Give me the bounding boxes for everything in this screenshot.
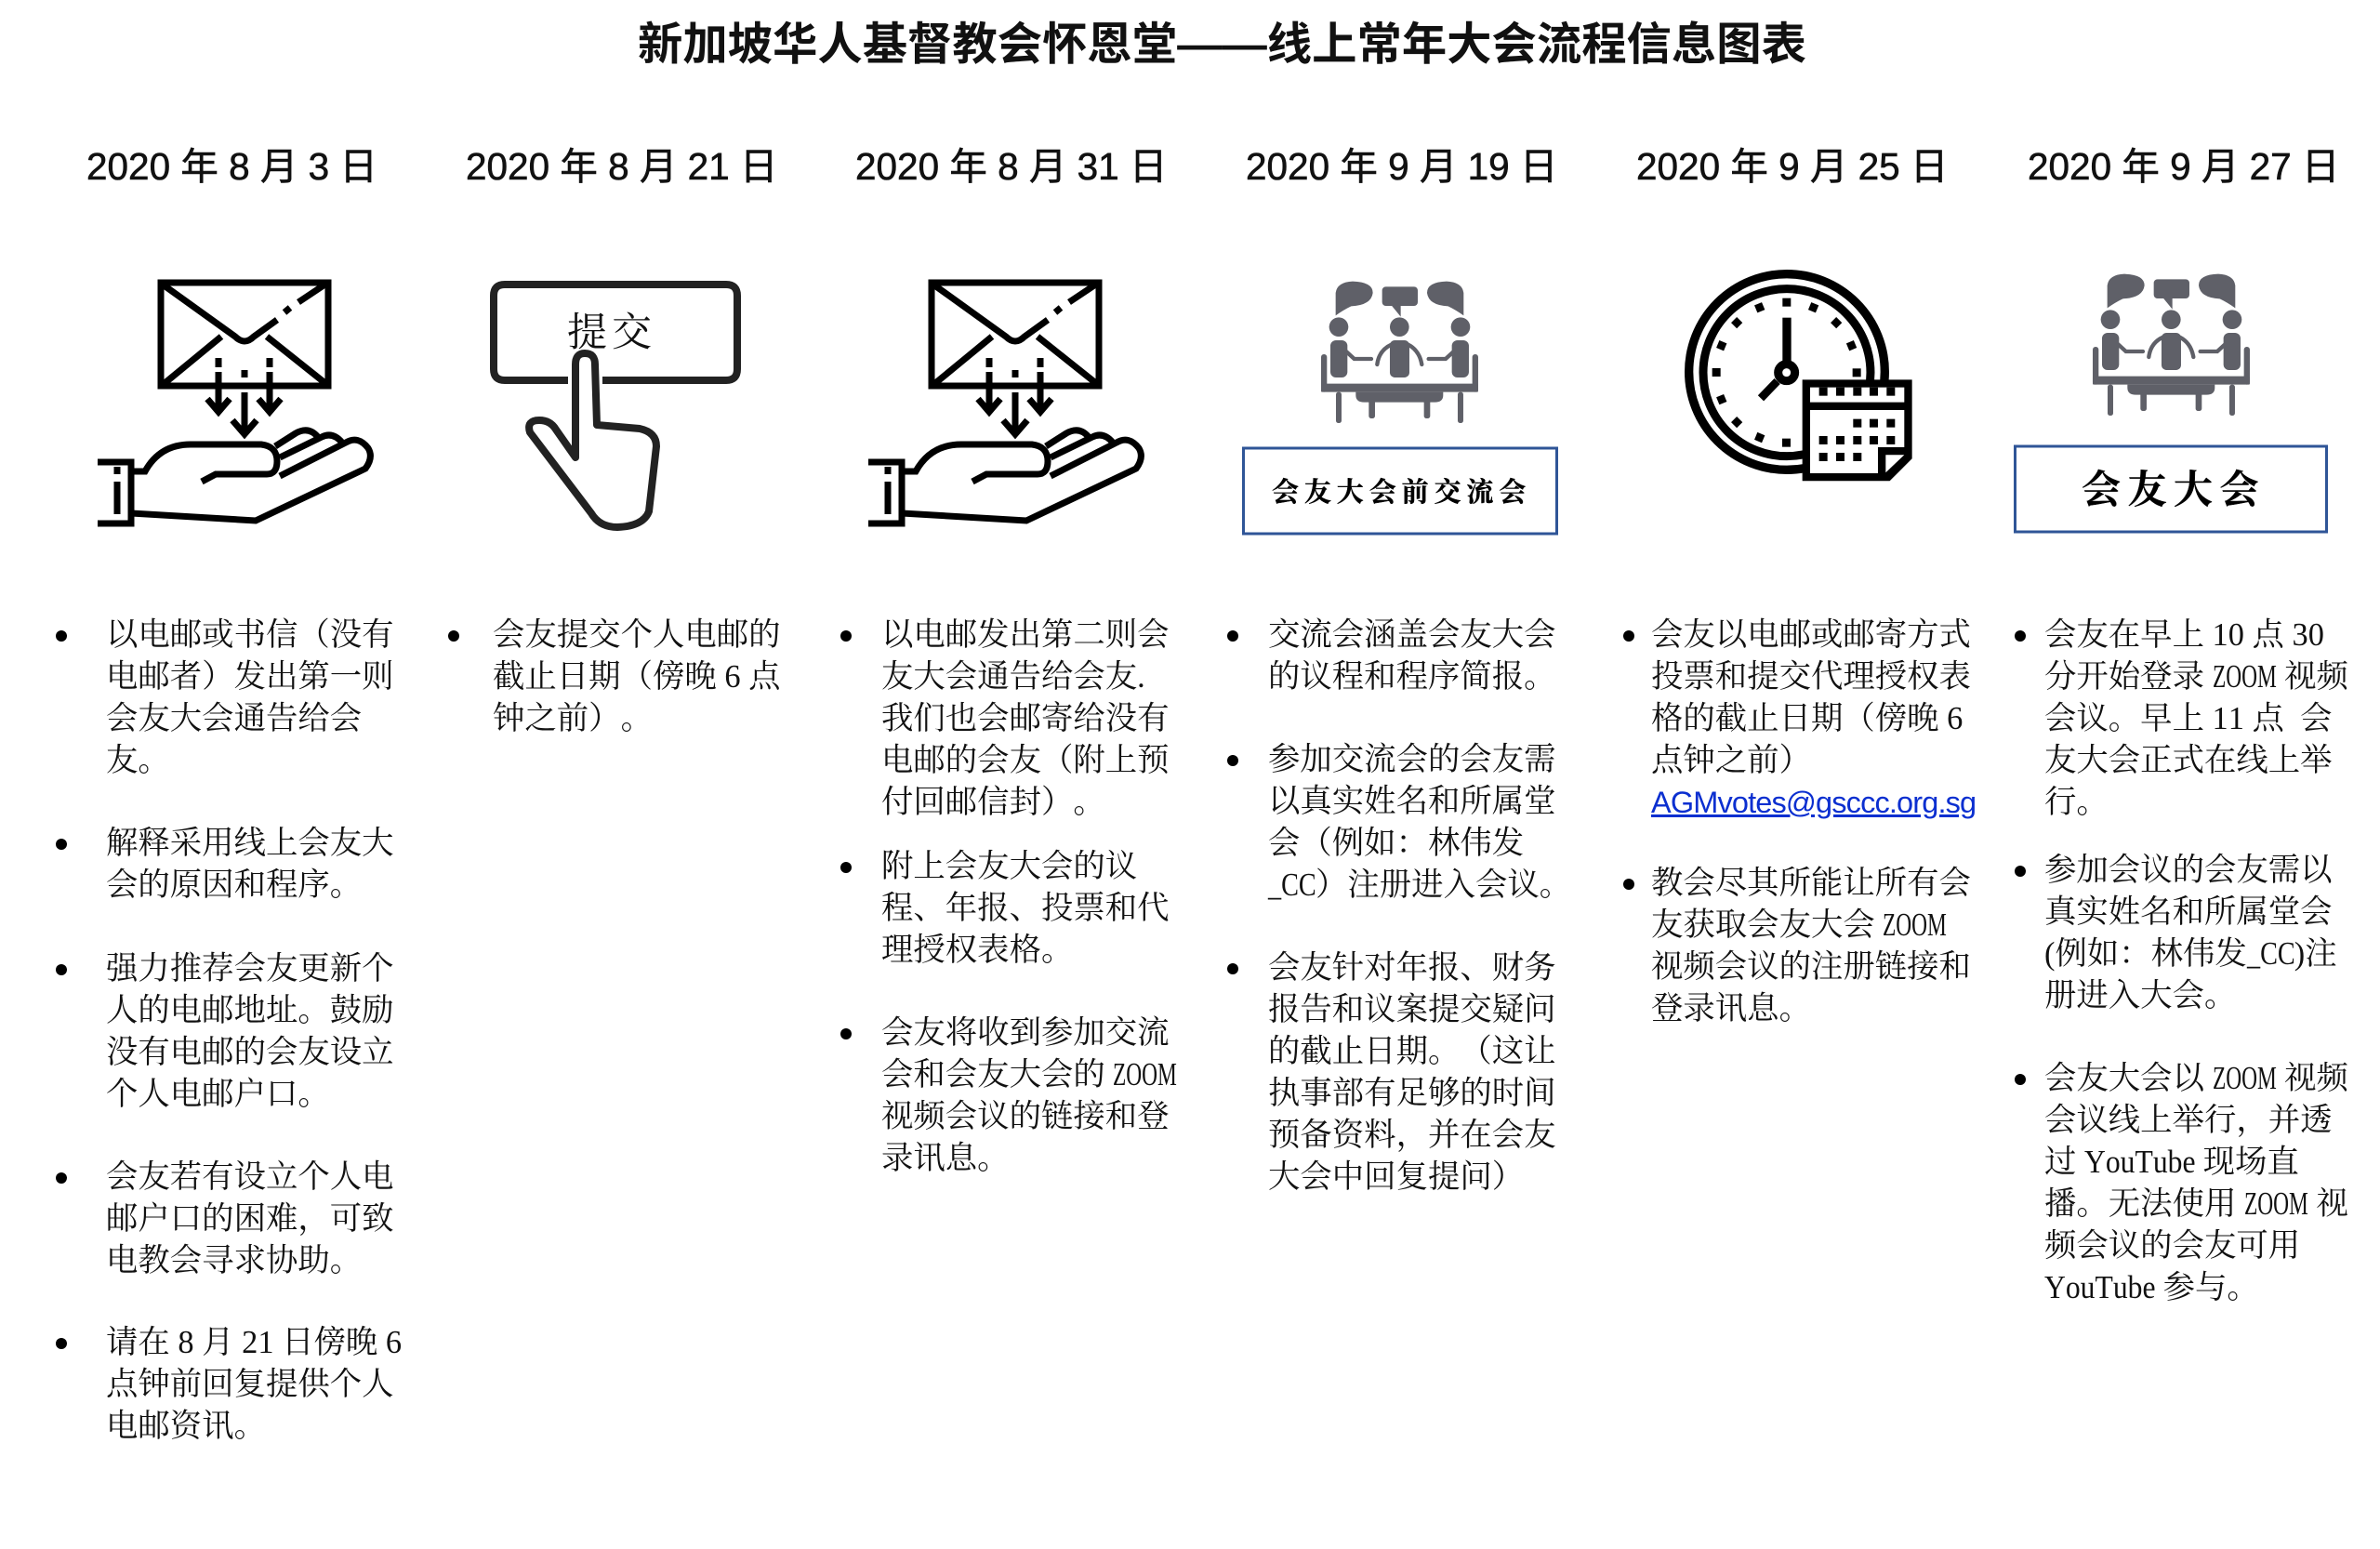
column 4 text bbox=[1227, 617, 1571, 1195]
date: 25 September: 2020 年 9 月 25 日 bbox=[1636, 145, 1948, 188]
bullet: first notice: 以电邮或书信（没有 电邮者）发出第一则 会友大会通告给会 友。 bbox=[106, 617, 394, 778]
bullet: help: 会友若有设立个人电 邮户口的困难，可致 电教会寻求协助。 bbox=[106, 1159, 394, 1278]
bullet: zoom and youtube: YouTube bbox=[2044, 1270, 2155, 1305]
column 3 text bbox=[840, 617, 1177, 1176]
bullet: register real name: _CC bbox=[2247, 936, 2295, 972]
bullet: zoom and youtube: ZOOM bbox=[2213, 1061, 2276, 1096]
bullet: questions deadline: 会友针对年报、财务 报告和议案提交疑问 的截止日期。（这让 执事部有足够的时间 预备资料，并在会友 大会中回复提问） bbox=[1268, 950, 1556, 1195]
bullet: zoom and youtube: 会友大会以 视频 会议线上举行，并透 过 现场直 播。无法使用 视 频会议的会友可用 参与。 bbox=[2044, 1061, 2348, 1305]
column 5 text bbox=[1623, 617, 1976, 1026]
bullet: vote deadline: 会友以电邮或邮寄方式 投票和提交代理授权表 格的截止日期（傍晚 6 点钟之前） AGMvotes@gsccc.org.sg bbox=[1651, 617, 1976, 819]
column 2 text bbox=[448, 617, 781, 736]
date: 3 August: 2020 年 8 月 3 日 bbox=[86, 145, 377, 188]
bullet: reason: 解释采用线上会友大 会的原因和程序。 bbox=[106, 826, 394, 903]
bullet: zoom and youtube: YouTube bbox=[2084, 1145, 2195, 1180]
label box: general meeting bbox=[2016, 446, 2326, 532]
bullet: login time: ZOOM bbox=[2213, 659, 2276, 695]
bullet: briefing: 交流会涵盖会友大会 的议程和程序简报。 bbox=[1268, 617, 1556, 695]
bullet: register real name: _CC bbox=[1268, 867, 1316, 903]
bullet: deadline reply: 请在 8 月 21 日傍晚 6 点钟前回复提供个人 电邮资讯。 bbox=[106, 1325, 402, 1444]
date: 19 September: 2020 年 9 月 19 日 bbox=[1246, 145, 1557, 188]
bullet: login time: 会友在早上 10 点 30 分开始登录 视频 会议。早上 11 点 会 友大会正式在线上举 行。 bbox=[2044, 617, 2348, 820]
bullet: second notice: 以电邮发出第二则会 友大会通告给会友. 我们也会邮寄给没有 电邮的会友（附上预 付回邮信封）。 bbox=[881, 617, 1170, 820]
bullet: registration access: ZOOM bbox=[1883, 907, 1947, 943]
bullet: register real name: 参加交流会的会友需 以真实姓名和所属堂 会（例如：林伟发 ）注册进入会议。 bbox=[1268, 742, 1571, 903]
icon: finger tapping submit button bbox=[494, 285, 737, 527]
icon: clock with calendar bbox=[1689, 274, 1912, 481]
date: 31 August: 2020 年 8 月 31 日 bbox=[855, 145, 1167, 188]
bullet: zoom links: ZOOM bbox=[1113, 1057, 1177, 1092]
icon: envelope over open hand (second notice) bbox=[868, 283, 1141, 523]
label box: pre-meeting: 会友大会前交流会 bbox=[1272, 477, 1531, 508]
column 6 text bbox=[2015, 617, 2348, 1305]
button label: 提交 bbox=[567, 311, 656, 355]
title: 新加坡华人基督教会怀恩堂——线上常年大会流程信息图表 bbox=[638, 20, 1806, 70]
icon: people meeting around a table (general meeting) bbox=[2093, 274, 2250, 416]
label box: general meeting: 会友大会 bbox=[2082, 469, 2266, 512]
bullet: register real name: 参加会议的会友需以 真实姓名和所属堂会 (例如：林伟发 )注 册进入大会。 bbox=[2044, 853, 2337, 1013]
date: 21 August: 2020 年 8 月 21 日 bbox=[466, 145, 777, 188]
date: 27 September: 2020 年 9 月 27 日 bbox=[2028, 145, 2339, 188]
bullet: zoom and youtube: ZOOM bbox=[2244, 1186, 2308, 1222]
icon: envelope over open hand (first notice) bbox=[98, 283, 370, 523]
icon: people meeting around a table (pre-meeting) bbox=[1321, 282, 1478, 423]
bullet: zoom links: 会友将收到参加交流 会和会友大会的 视频会议的链接和登 录讯息。 bbox=[881, 1015, 1170, 1176]
bullet: attachments: 附上会友大会的议 程、年报、投票和代 理授权表格。 bbox=[881, 849, 1170, 968]
column 1 text bbox=[56, 617, 402, 1444]
label box: pre-meeting bbox=[1244, 448, 1556, 534]
bullet: update email: 强力推荐会友更新个 人的电邮地址。鼓励 没有电邮的会友设立 个人电邮户口。 bbox=[106, 951, 394, 1112]
bullet: submit email deadline: 会友提交个人电邮的 截止日期（傍晚 6 点 钟之前）。 bbox=[493, 617, 781, 736]
bullet: registration access: 教会尽其所能让所有会 友获取会友大会 视频会议的注册链接和 登录讯息。 bbox=[1651, 866, 1971, 1026]
